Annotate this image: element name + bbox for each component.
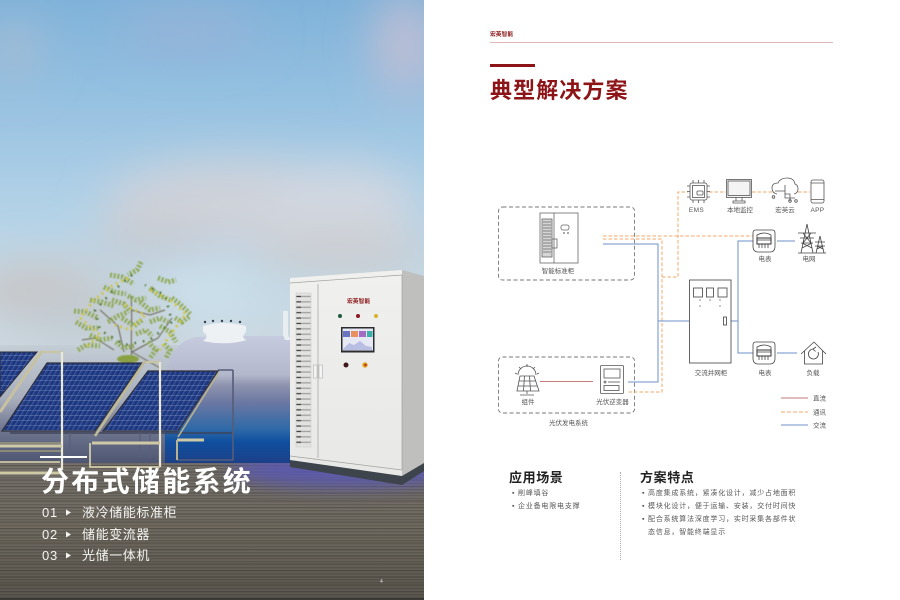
tank behind cabinet [165,311,300,465]
buttons [344,362,368,368]
ground [0,463,424,600]
label: load: 负载 [806,368,820,377]
product list: 光储一体机 [82,548,150,563]
icon: cloud [772,178,798,202]
vent slats [296,293,311,447]
touch screen [341,327,374,352]
cabinet logo: 宏英智能 [347,297,370,305]
icon: meter upper [753,230,775,252]
icon: phone [811,180,824,203]
icon: load house [801,342,826,364]
dashed box: pv system [498,357,634,413]
header rule [490,42,833,43]
solar panels [0,351,233,473]
main title: 分布式储能系统 [41,466,253,497]
cabinet side [402,270,424,476]
heading: features: 方案特点 [640,470,694,485]
heading: 典型解决方案 [490,78,629,103]
label: grid: 电网 [802,254,816,263]
label: storage cabinet: 智能标准柜 [542,266,575,275]
section: application scenarios [509,470,580,510]
heading: scenarios: 应用场景 [509,470,563,485]
icon: storage cabinet [540,213,578,263]
list: scenarios [512,489,580,510]
label: ems: EMS [689,207,704,214]
icon: grid cabinet [690,280,731,363]
icon: meter lower [753,342,775,364]
label: meter upper: 电表 [758,254,772,263]
label: monitor: 本地监控 [727,205,754,214]
legend: 交流 [813,420,826,430]
label: inverter: 光伏逆变器 [596,397,629,406]
heading accent bar [490,64,535,67]
brand header: 宏英智能 [490,32,513,38]
indicator lights [338,314,378,318]
list: features [642,489,796,536]
system diagram [498,178,826,430]
dashed box: storage [498,207,634,280]
label: cloud: 宏英云 [775,205,795,214]
product cabinet [290,270,424,485]
communication lines [603,192,810,392]
product list: 03 [42,548,58,563]
section: solution features [640,470,796,536]
icon: monitor [726,180,752,203]
product list [42,505,177,563]
tree [74,262,190,368]
icon: pv inverter [600,366,624,394]
dc line [540,381,593,382]
list: scenarios: ▪ 企业备电限电支撑 [512,503,580,510]
divider [620,472,621,560]
label: pv system: 光伏发电系统 [549,418,588,427]
icon: power tower [798,224,826,253]
legend: 直流 [813,394,826,402]
product list: 液冷储能标准柜 [82,505,177,520]
ac lines [603,241,797,382]
list: features: ▪ 模块化设计，便于运输、安装，交付时间快 [642,503,796,510]
page number: 4 [380,579,383,585]
panel: photo with product and title [0,0,424,600]
list: features: ▪ 配合系统算法深度学习，实时采集各部件状 [642,516,796,523]
list: features: ▪ 高度集成系统，紧凑化设计，减少占地面积 [642,490,796,497]
icon: solar module [515,364,539,395]
list: features: 态信息，智能终端显示 [648,529,726,536]
sky background [0,0,437,465]
label: grid cabinet: 交流并网柜 [695,368,728,377]
legend: 通讯 [813,408,826,416]
label: meter lower: 电表 [758,368,772,377]
legend [781,394,826,430]
door handles [314,365,322,378]
label: app: APP [811,207,824,214]
list: scenarios: ▪ 削峰填谷 [512,490,549,497]
label: module: 组件 [522,397,535,406]
product list: 储能变流器 [82,527,150,542]
cabinet plinth [290,460,424,485]
product list: 02 [42,527,58,542]
product list: 01 [42,505,58,520]
cabinet front [290,270,402,476]
icon: ems chip [687,180,710,203]
